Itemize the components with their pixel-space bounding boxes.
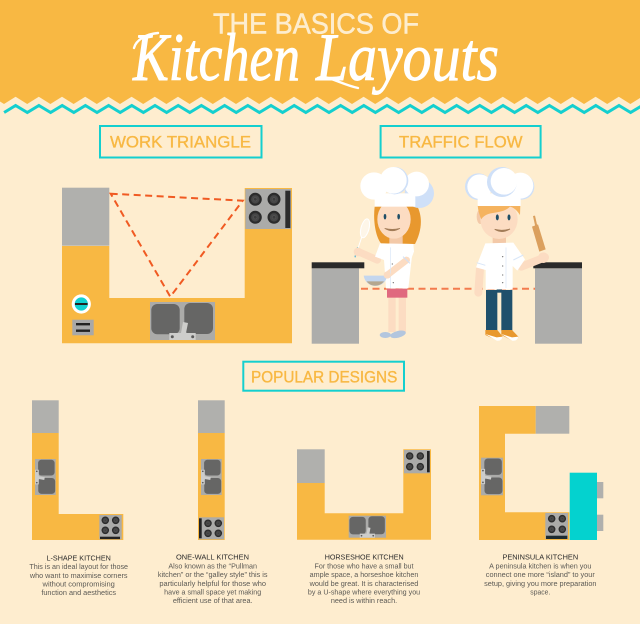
panel: one-wall kitchen: [158, 400, 268, 605]
dashed traffic line: [361, 288, 535, 290]
one-wall caption: Also known as the “Pullman: [168, 564, 257, 570]
traffic flow scene: [312, 167, 582, 344]
sink: [150, 302, 215, 340]
icon: bin: [72, 294, 91, 314]
panel: L-shape kitchen: [29, 400, 128, 597]
title: [132, 8, 499, 95]
horseshoe caption: would be great. It is characterised: [309, 581, 419, 588]
one-wall caption: particularly helpful for those who: [159, 581, 266, 588]
one-wall caption: kitchen” or the “galley style” this is: [158, 572, 268, 579]
dashed work triangle: [111, 194, 243, 297]
header banner: [0, 0, 640, 104]
left counter: [312, 262, 364, 344]
one-wall caption: ONE-WALL KITCHEN: [176, 553, 249, 562]
counter: U-shape: [62, 188, 292, 343]
title: Kitchen: [132, 19, 300, 95]
chef: woman: [354, 167, 434, 340]
chef: man: [465, 167, 549, 341]
title: THE BASICS OF: [213, 8, 419, 40]
horseshoe caption: HORSESHOE KITCHEN: [325, 553, 404, 562]
peninsula caption: setup, giving you more preparation: [484, 581, 597, 588]
L-shape caption: L-SHAPE KITCHEN: [47, 553, 111, 562]
icon: drawer: [72, 320, 94, 335]
right counter: [533, 262, 582, 344]
one-wall caption: [158, 553, 268, 605]
L-shape caption: function and aesthetics: [41, 590, 117, 597]
L-shape caption: who want to maximise corners: [29, 573, 128, 580]
teal zigzag border: [4, 106, 640, 112]
heading: traffic flow: TRAFFIC FLOW: [399, 134, 523, 152]
work triangle kitchen plan: [62, 188, 292, 343]
one-wall caption: have a small space yet making: [164, 590, 261, 596]
horseshoe caption: by a U-shape where everything you: [308, 590, 420, 596]
L-shape caption: without compromising: [41, 582, 115, 588]
horseshoe caption: need is within reach.: [331, 598, 397, 605]
fridge: [62, 188, 109, 246]
heading: work triangle: [100, 126, 262, 158]
peninsula caption: [484, 553, 597, 596]
horseshoe caption: ample space, a horseshoe kitchen: [310, 572, 419, 579]
heading: popular designs: POPULAR DESIGNS: [251, 369, 397, 387]
L-shape caption: This is an ideal layout for those: [29, 564, 128, 571]
peninsula caption: connect one more “island” to your: [486, 572, 596, 579]
peninsula caption: space.: [530, 590, 550, 596]
L-shape caption: [29, 553, 128, 597]
panel: peninsula kitchen: [479, 406, 603, 596]
stove: [245, 189, 291, 229]
horseshoe plan: [297, 449, 431, 540]
title: Layouts: [315, 19, 499, 95]
horseshoe caption: For those who have a small but: [314, 564, 414, 570]
one-wall plan: [198, 400, 225, 540]
heading: traffic flow: [381, 126, 541, 158]
heading: popular designs: [243, 362, 404, 391]
peninsula plan: [479, 406, 603, 540]
one-wall caption: efficient use of that area.: [173, 598, 253, 605]
peninsula caption: PENINSULA KITCHEN: [502, 553, 578, 562]
heading: work triangle: WORK TRIANGLE: [110, 134, 251, 152]
L-shape plan: [32, 400, 123, 540]
panel: horseshoe kitchen: [297, 449, 431, 605]
peninsula caption: A peninsula kitchen is when you: [489, 564, 592, 570]
horseshoe caption: [308, 553, 420, 605]
